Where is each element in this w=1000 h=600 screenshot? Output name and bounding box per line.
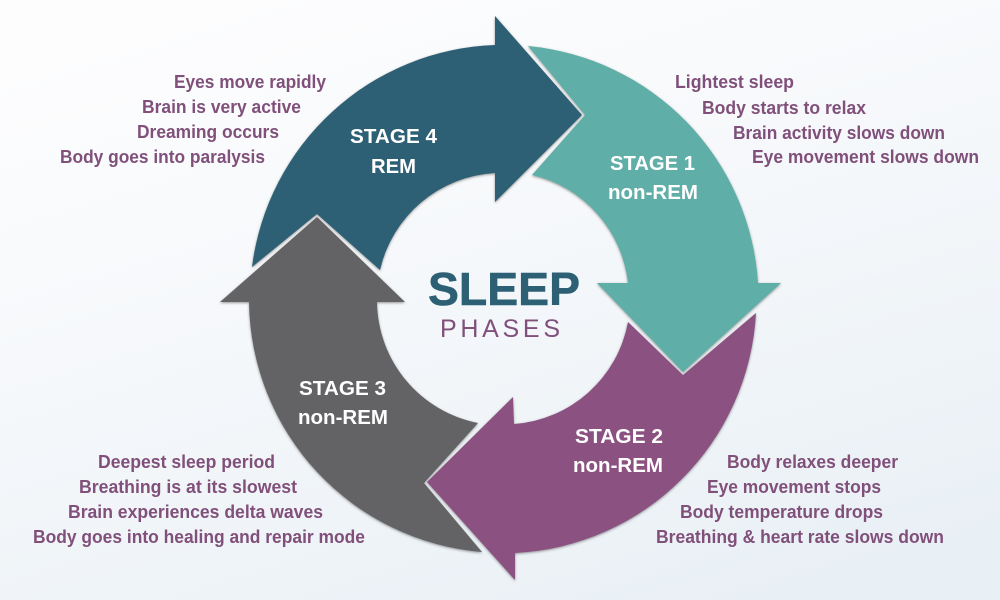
arrow: stage 2 non-REM: STAGE 2	[575, 426, 663, 448]
text block: stage 1 notes: Brain activity slows down	[733, 123, 945, 143]
arrow: stage 4 REM: STAGE 4	[350, 126, 438, 148]
arrow: stage 1 non-REM: non-REM	[608, 182, 698, 204]
arrow: stage 3 non-REM: STAGE 3	[299, 378, 386, 400]
text block: stage 4 notes	[60, 72, 326, 167]
title: sleep phases: SLEEP	[428, 263, 580, 315]
text block: stage 2 notes: Body temperature drops	[680, 502, 883, 522]
arrow: stage 2 non-REM	[427, 313, 756, 580]
text block: stage 2 notes: Body relaxes deeper	[727, 452, 898, 472]
title: sleep phases: PHASES	[440, 315, 560, 343]
text block: stage 3 notes: Breathing is at its slowest	[79, 477, 297, 497]
text block: stage 1 notes: Body starts to relax	[702, 98, 866, 118]
text block: stage 3 notes	[33, 452, 365, 547]
text block: stage 4 notes: Body goes into paralysis	[60, 147, 265, 167]
text block: stage 3 notes: Brain experiences delta waves	[68, 502, 323, 522]
text block: stage 1 notes	[675, 72, 979, 167]
text block: stage 4 notes: Brain is very active	[142, 97, 301, 117]
text block: stage 2 notes: Breathing & heart rate slows down	[656, 527, 944, 547]
text block: stage 1 notes: Eye movement slows down	[752, 147, 979, 167]
text block: stage 2 notes: Eye movement stops	[707, 477, 881, 497]
arrow: stage 3 non-REM	[220, 217, 482, 552]
arrow: stage 1 non-REM: STAGE 1	[610, 153, 695, 175]
text block: stage 4 notes: Dreaming occurs	[137, 122, 279, 142]
text block: stage 2 notes	[656, 452, 944, 547]
arrow: stage 4 REM	[252, 16, 582, 270]
title: sleep phases	[428, 263, 580, 343]
arrow: stage 2 non-REM: non-REM	[573, 455, 663, 477]
arrow: stage 4 REM: REM	[371, 156, 416, 178]
arrow: stage 3 non-REM: non-REM	[298, 407, 388, 429]
text block: stage 3 notes: Body goes into healing and repair mode	[33, 527, 365, 547]
text block: stage 4 notes: Eyes move rapidly	[174, 72, 326, 92]
text block: stage 1 notes: Lightest sleep	[675, 72, 794, 92]
text block: stage 3 notes: Deepest sleep period	[98, 452, 275, 472]
arrow: stage 1 non-REM	[528, 46, 781, 372]
